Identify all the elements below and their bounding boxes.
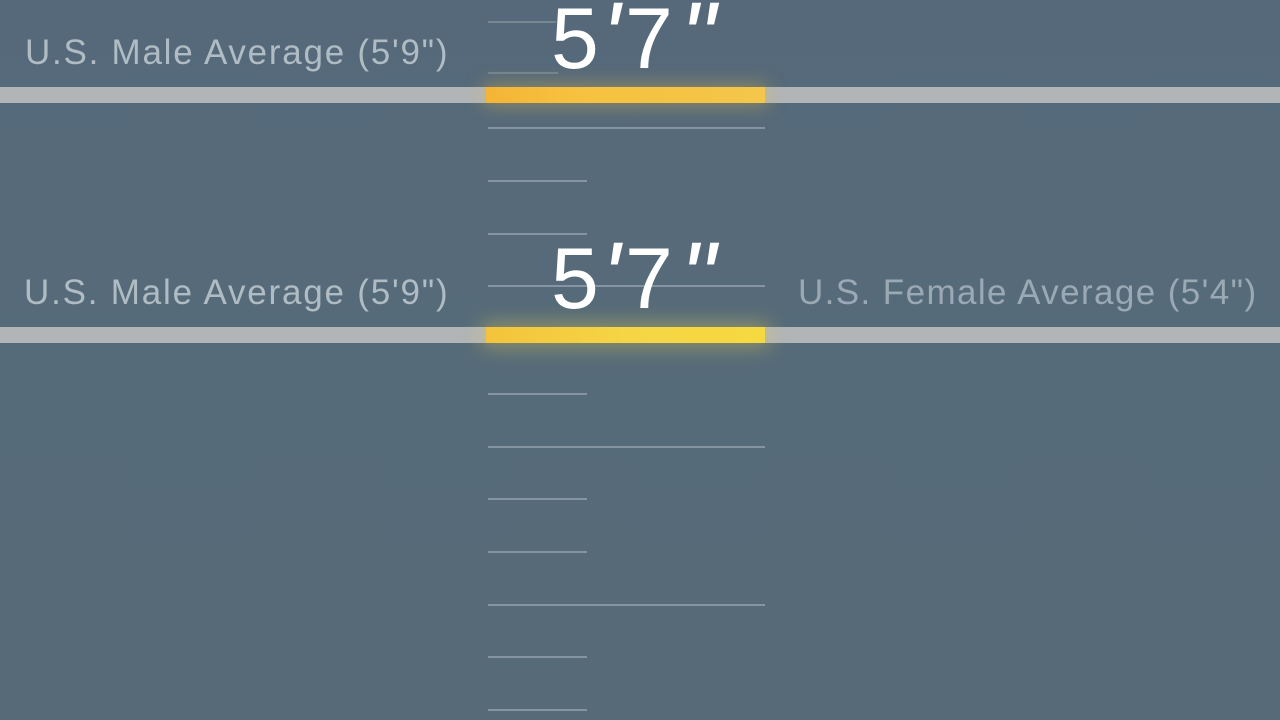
upper reference bar [0, 87, 1280, 103]
lower label: U.S. male average: U.S. Male Average (5'9") [24, 273, 449, 312]
upper label: U.S. male average: U.S. Male Average (5'9") [25, 33, 449, 72]
lower height value: 5 [551, 231, 599, 327]
lower label: U.S. female average: U.S. Female Average (5'4") [798, 273, 1258, 312]
lower height value: ' [601, 222, 620, 334]
lower highlighted height marker [486, 327, 765, 343]
upper highlighted height marker [486, 87, 765, 103]
upper height value [551, 0, 720, 94]
lower height value: " [680, 222, 716, 334]
lower height value [551, 222, 720, 334]
lower reference bar [0, 327, 1280, 343]
lower height value: 7 [625, 231, 673, 327]
